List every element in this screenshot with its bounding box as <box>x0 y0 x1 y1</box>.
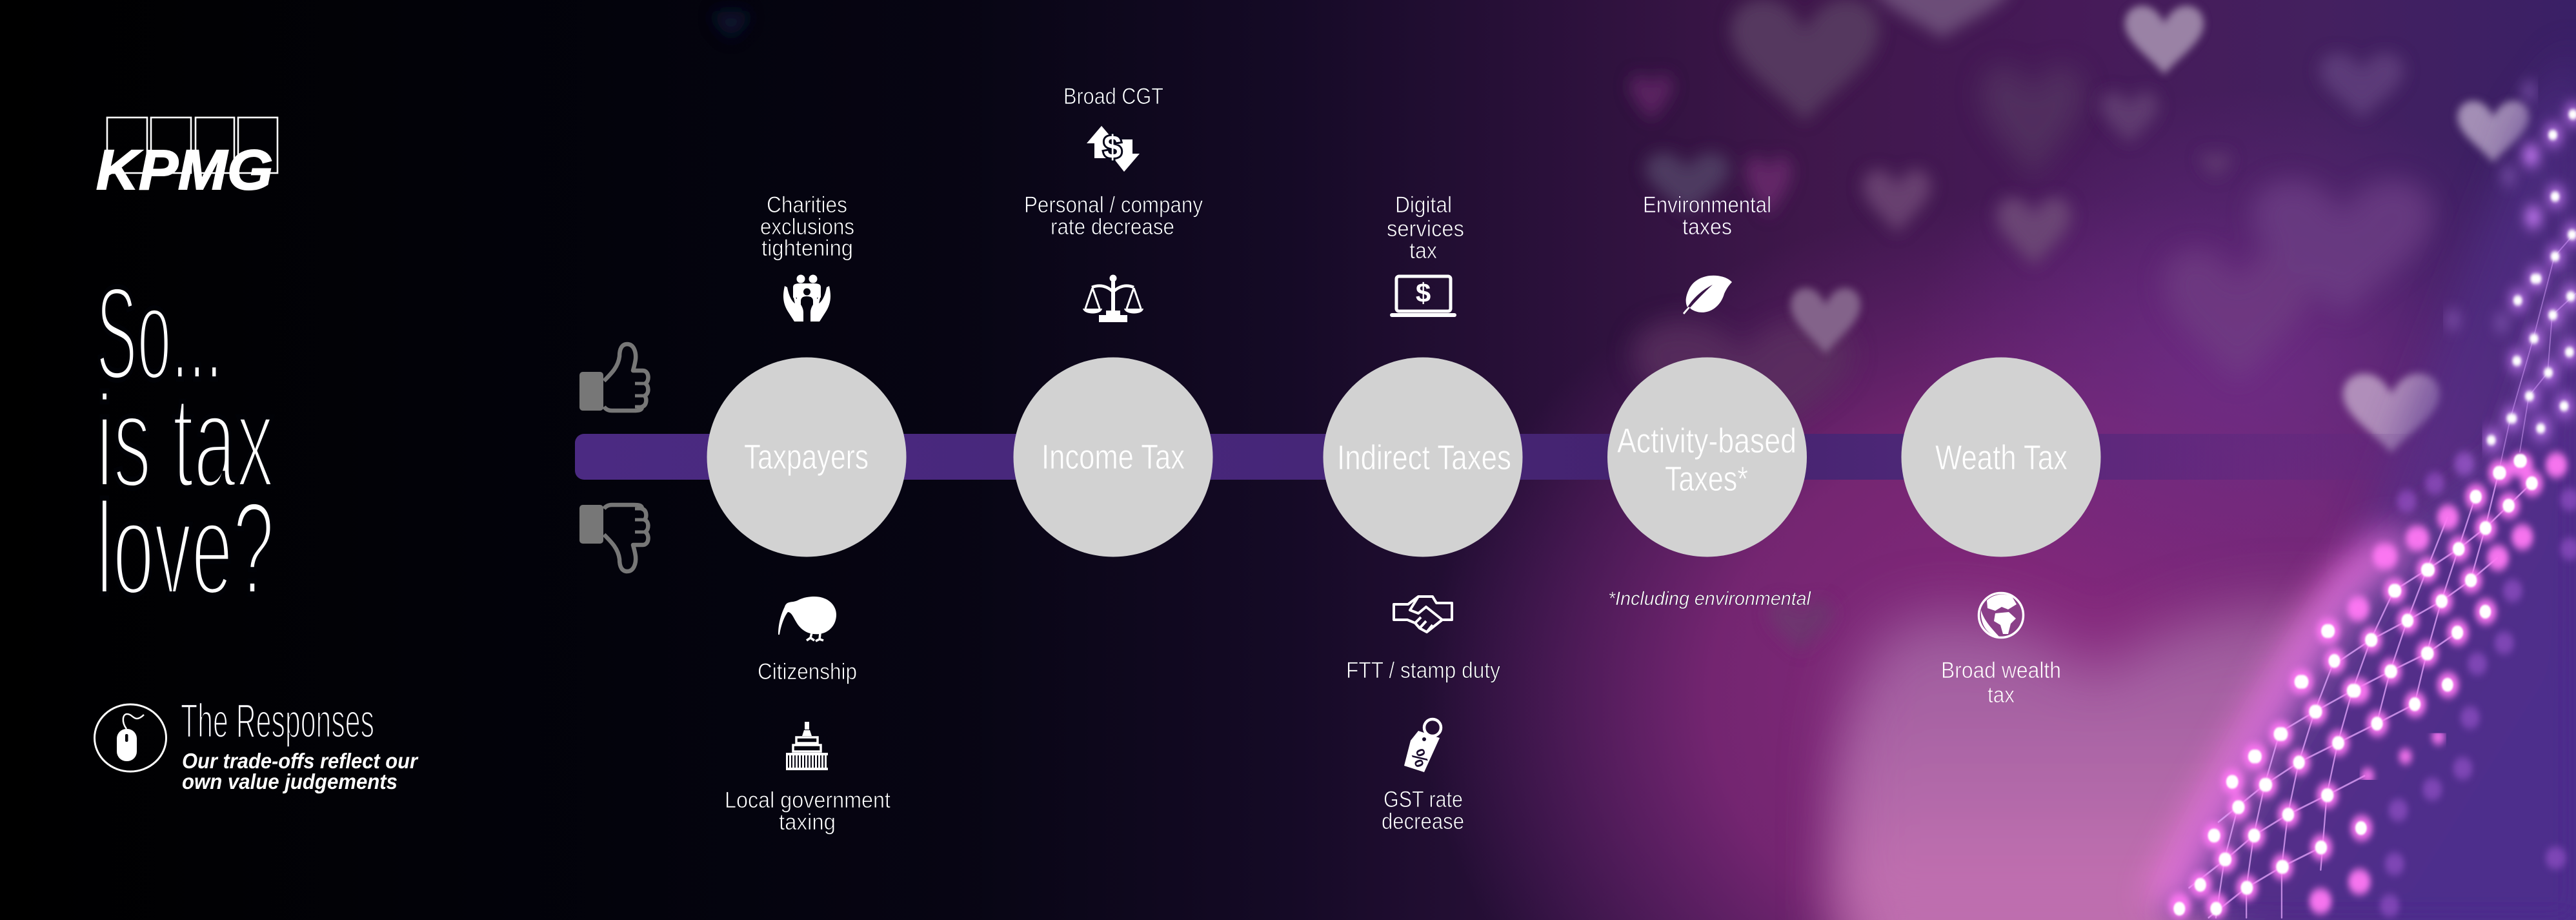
node: Indirect Taxes circle: Indirect Taxes <box>1337 438 1511 477</box>
icon: mouse in circle <box>94 704 166 772</box>
icon: laptop with dollar <box>1390 276 1456 317</box>
logo: KPMG <box>96 118 277 201</box>
icon: price tag: % <box>1406 746 1433 770</box>
label: Charities exclusions tightening: tightening <box>761 236 853 261</box>
label: Environmental taxes <box>1643 192 1771 240</box>
label: Broad wealth tax: tax <box>1987 682 2015 708</box>
node: Weath Tax circle <box>1901 358 2101 557</box>
timeline bar <box>575 434 2452 480</box>
node: Weath Tax circle: Weath Tax <box>1935 438 2068 477</box>
label: Charities exclusions tightening <box>760 192 854 261</box>
mesh lower section <box>2179 461 2571 917</box>
icon: handshake <box>1394 597 1452 632</box>
panel: Indirect Taxes <box>1323 192 1523 834</box>
icon: scales of justice <box>1083 275 1143 322</box>
label: Charities exclusions tightening: Charities <box>767 192 847 218</box>
label: Personal / company rate decrease: Personal / company <box>1024 192 1203 218</box>
label: GST rate decrease <box>1382 787 1464 834</box>
label: Citizenship: Citizenship <box>758 659 857 684</box>
title: So... is tax love?: is tax <box>96 367 274 515</box>
label: FTT / stamp duty: FTT / stamp duty <box>1346 658 1500 683</box>
label: Digital services tax: services <box>1387 216 1464 241</box>
label: GST rate decrease: decrease <box>1382 809 1464 834</box>
icon: dollar arrows <box>1087 126 1140 172</box>
node: Activity-based Taxes circle: Taxes* <box>1665 460 1748 498</box>
label: Broad wealth tax <box>1941 658 2061 708</box>
node: Taxpayers circle: Taxpayers <box>744 438 869 476</box>
text: trade-offs statement: Our trade-offs reflect our <box>182 749 419 773</box>
heading: The Responses: The Responses <box>181 694 374 748</box>
label: Environmental taxes: Environmental <box>1643 192 1771 218</box>
label: Broad wealth tax: Broad wealth <box>1941 658 2061 683</box>
title: So... is tax love?: So... <box>96 260 223 407</box>
label: Digital services tax: Digital <box>1395 192 1452 218</box>
section: The Responses <box>94 694 419 793</box>
label: Digital services tax <box>1387 192 1464 263</box>
node: Indirect Taxes circle <box>1323 358 1523 557</box>
label: Environmental taxes: taxes <box>1682 214 1732 240</box>
label: GST rate decrease: GST rate <box>1384 787 1463 812</box>
node: Activity-based Taxes circle: Activity-based <box>1617 422 1796 460</box>
text: trade-offs statement <box>182 749 419 793</box>
icon: globe <box>1978 593 2024 638</box>
node: Taxpayers circle <box>707 358 906 557</box>
icon: leaf <box>1683 276 1732 314</box>
logo: KPMG: KPMG <box>96 139 273 201</box>
icon: laptop with dollar: $ <box>1416 278 1431 308</box>
panel: Taxpayers <box>707 192 906 835</box>
title: So... is tax love? <box>96 260 274 622</box>
label: Local government taxing: Local government <box>725 788 891 813</box>
icon: kiwi bird <box>778 597 836 641</box>
title: So... is tax love?: love? <box>96 475 274 622</box>
label: Charities exclusions tightening: exclusions <box>760 214 854 240</box>
label: Digital services tax: tax <box>1409 238 1437 263</box>
icon: dollar arrows: $ <box>1103 129 1122 165</box>
text: trade-offs statement: own value judgements <box>182 770 397 793</box>
icon: price tag <box>1404 719 1441 772</box>
panel: Activity-based Taxes <box>1607 192 1811 609</box>
panel: Wealth Tax <box>1901 358 2101 708</box>
mesh upper section <box>2451 91 2576 474</box>
icon: government building <box>786 722 828 770</box>
icon: family in hands <box>783 275 830 322</box>
icon: thumbs up <box>579 344 649 411</box>
label: Broad CGT: Broad CGT <box>1063 84 1163 109</box>
icon: thumbs down <box>579 505 649 571</box>
node: Income Tax circle <box>1013 358 1213 557</box>
node: Activity-based Taxes circle <box>1607 358 1807 557</box>
label: Personal / company rate decrease: rate decrease <box>1051 214 1174 240</box>
note: Including environmental: *Including environmental <box>1608 588 1811 609</box>
label: Personal / company rate decrease <box>1024 192 1203 240</box>
node: Income Tax circle: Income Tax <box>1041 438 1185 476</box>
panel: Income Tax <box>1013 84 1213 557</box>
label: Local government taxing: taxing <box>779 810 836 835</box>
label: Local government taxing <box>725 788 891 835</box>
